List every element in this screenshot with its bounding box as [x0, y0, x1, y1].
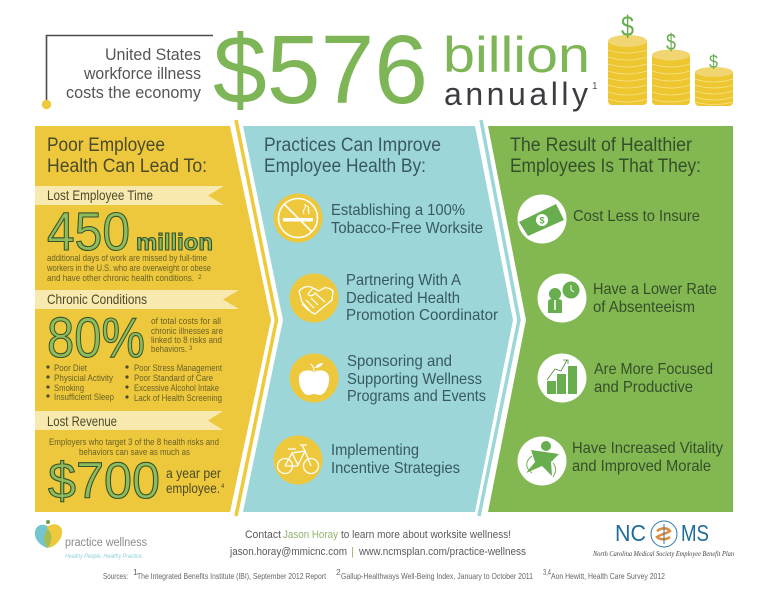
text: per employee — [166, 465, 225, 496]
text: wellness programs: Programs and Events — [347, 388, 486, 405]
text: per employee: employee. — [166, 480, 220, 496]
chevron stripe: yellow — [236, 120, 276, 516]
stat: 80%: 80% — [47, 306, 145, 370]
headline unit: billion — [443, 27, 590, 83]
text: health coordinator: Dedicated Health — [346, 290, 460, 307]
icon: no smoking — [274, 194, 322, 242]
intro text: United States — [105, 45, 201, 64]
text: revenue detail: Employers who target 3 of the 8 health risks and — [49, 437, 219, 448]
heading: practices: Practices Can Improve — [264, 135, 441, 156]
text: revenue detail: behaviors can save as much as — [79, 447, 190, 458]
text: per employee: 4 — [221, 484, 225, 490]
icon: apple — [290, 354, 338, 402]
risk list: Smoking — [54, 383, 84, 394]
text: incentives — [331, 442, 460, 477]
headline figure: $576 — [213, 15, 428, 124]
text: productivity: Are More Focused — [594, 361, 713, 378]
risk list: Poor Stress Management — [134, 363, 222, 374]
intro text — [66, 45, 201, 102]
contact details: Contact — [245, 529, 281, 541]
sources: Gallup-Healthways Well-Being Index, January to October 2011 — [341, 571, 533, 581]
panel: causes — [35, 126, 271, 512]
risk list: Physicial Activity — [54, 373, 113, 384]
text: lost time detail — [46, 253, 211, 283]
risk list: Poor Standard of Care — [134, 373, 213, 384]
panel: results — [488, 126, 733, 512]
text: lost time detail: 2 — [198, 274, 202, 281]
contact details: Jason Horay — [283, 529, 338, 541]
stat: 450 million — [47, 202, 213, 262]
risk list: Excessive Alcohol Intake — [134, 383, 219, 394]
text: chronic detail: chronic illnesses are — [151, 326, 223, 336]
risk list — [46, 363, 222, 404]
text: wellness programs — [347, 353, 486, 405]
text: lost time detail: and have other chronic health conditions. — [47, 273, 194, 283]
heading: causes — [47, 135, 207, 177]
text: productivity: and Productive — [594, 379, 693, 396]
logo: NCMS — [592, 520, 734, 558]
text: wellness programs: Supporting Wellness — [347, 371, 482, 388]
sources: Aon Hewitt, Health Care Survey 2012 — [551, 571, 665, 581]
logo: NCMS: North Carolina Medical Society Employee Benefit Plan — [592, 550, 734, 558]
logo: NCMS: MS — [681, 520, 709, 546]
heading: practices: Employee Health By: — [264, 156, 426, 177]
text: lost time detail: workers in the U.S. who are overweight or obese — [46, 263, 211, 273]
stat: $700: $700 — [48, 452, 160, 509]
icon: NCMS caduceus — [651, 521, 677, 547]
text: lost time detail: additional days of work are missed by full-time — [47, 253, 207, 263]
text: incentives: Implementing — [331, 442, 419, 459]
text: revenue detail — [49, 437, 219, 458]
icon: handshake — [290, 274, 338, 322]
icon: bicycle — [274, 436, 322, 484]
icon: coin stacks — [608, 11, 733, 106]
text: insurance: Cost Less to Insure — [573, 208, 700, 225]
banner: lost employee time — [35, 186, 224, 205]
icon: dollar bill — [518, 194, 566, 244]
text: wellness programs: Sponsoring and — [347, 353, 452, 370]
heading: causes: Poor Employee — [47, 135, 165, 156]
sources: 2 — [336, 567, 341, 577]
sources: Sources: — [103, 571, 128, 581]
icon: apple logo — [35, 520, 62, 548]
text: chronic detail: of total costs for all — [151, 316, 221, 326]
text: health coordinator: Partnering With A — [346, 272, 461, 289]
banner: lost employee time: Lost Employee Time — [47, 187, 153, 203]
bracket with dot — [42, 36, 213, 109]
logo: NCMS: NC — [615, 520, 646, 546]
text: morale: and Improved Morale — [572, 458, 711, 475]
text: health coordinator — [346, 272, 499, 324]
sources: 3,4 — [543, 567, 551, 577]
logo: practice wellness — [35, 520, 147, 560]
footnote marker: 1 — [592, 81, 598, 92]
logo: practice wellness: Healthy People. Healthy Practice. — [65, 553, 143, 560]
heading: causes: Health Can Lead To: — [47, 156, 207, 177]
text: productivity — [594, 361, 713, 396]
header — [42, 11, 733, 124]
icon: dollar bill: $ — [540, 216, 545, 226]
stat: 450 million: million — [136, 229, 213, 255]
risk list: Lack of Health Screening — [134, 393, 222, 404]
contact details: www.ncmsplan.com/practice-wellness — [358, 546, 526, 558]
text: tobacco-free: Establishing a 100% — [331, 202, 465, 219]
risk list: Insufficient Sleep — [54, 392, 114, 403]
contact details — [229, 529, 526, 558]
text: absenteeism — [593, 281, 717, 316]
banner: chronic conditions — [35, 290, 239, 309]
text: morale: Have Increased Vitality — [572, 440, 723, 457]
text: chronic detail: 3 — [189, 346, 193, 352]
intro text: costs the economy — [66, 83, 201, 102]
text: absenteeism: Have a Lower Rate — [593, 281, 717, 298]
heading: results: The Result of Healthier — [510, 135, 693, 156]
icon: coin stacks: $ — [709, 52, 718, 72]
icon: rising bar chart — [538, 354, 586, 402]
contact details: jason.horay@mmicnc.com — [229, 546, 347, 558]
banner: lost revenue: Lost Revenue — [47, 413, 117, 429]
logo: practice wellness: practice wellness — [65, 537, 147, 549]
heading: results — [510, 135, 701, 177]
sources: The Integrated Benefits Institute (IBI), September 2012 Report — [137, 571, 327, 581]
text: chronic detail — [151, 316, 223, 354]
intro text: workforce illness — [83, 64, 201, 83]
text: absenteeism: of Absenteeism — [593, 299, 695, 316]
text: health coordinator: Promotion Coordinator — [346, 307, 499, 324]
text: incentives: Incentive Strategies — [331, 460, 460, 477]
icon: coin stacks: $ — [621, 11, 634, 43]
heading: practices — [264, 135, 441, 177]
sources: 1 — [133, 567, 138, 577]
annually: annually — [444, 76, 588, 112]
chevron stripe: teal — [479, 120, 519, 516]
text: per employee: a year per — [166, 465, 221, 481]
sources — [103, 567, 665, 581]
stat: 450 million: 450 — [47, 202, 130, 262]
text: tobacco-free — [331, 202, 483, 237]
text: tobacco-free: Tobacco-Free Worksite — [331, 220, 483, 237]
contact details: to learn more about worksite wellness! — [341, 529, 511, 541]
risk list: Poor Diet — [54, 363, 87, 374]
icon: coin stacks: $ — [666, 29, 676, 55]
heading: results: Employees Is That They: — [510, 156, 701, 177]
text: chronic detail: linked to 8 risks and — [151, 335, 222, 345]
banner: lost revenue — [35, 411, 223, 430]
text: morale — [572, 440, 723, 475]
icon: vitality figure — [518, 436, 566, 486]
contact details: | — [351, 546, 354, 558]
icon: person and clock — [538, 274, 586, 322]
banner: chronic conditions: Chronic Conditions — [47, 291, 147, 307]
text: chronic detail: behaviors. — [151, 344, 187, 354]
panel: practices — [243, 126, 513, 512]
